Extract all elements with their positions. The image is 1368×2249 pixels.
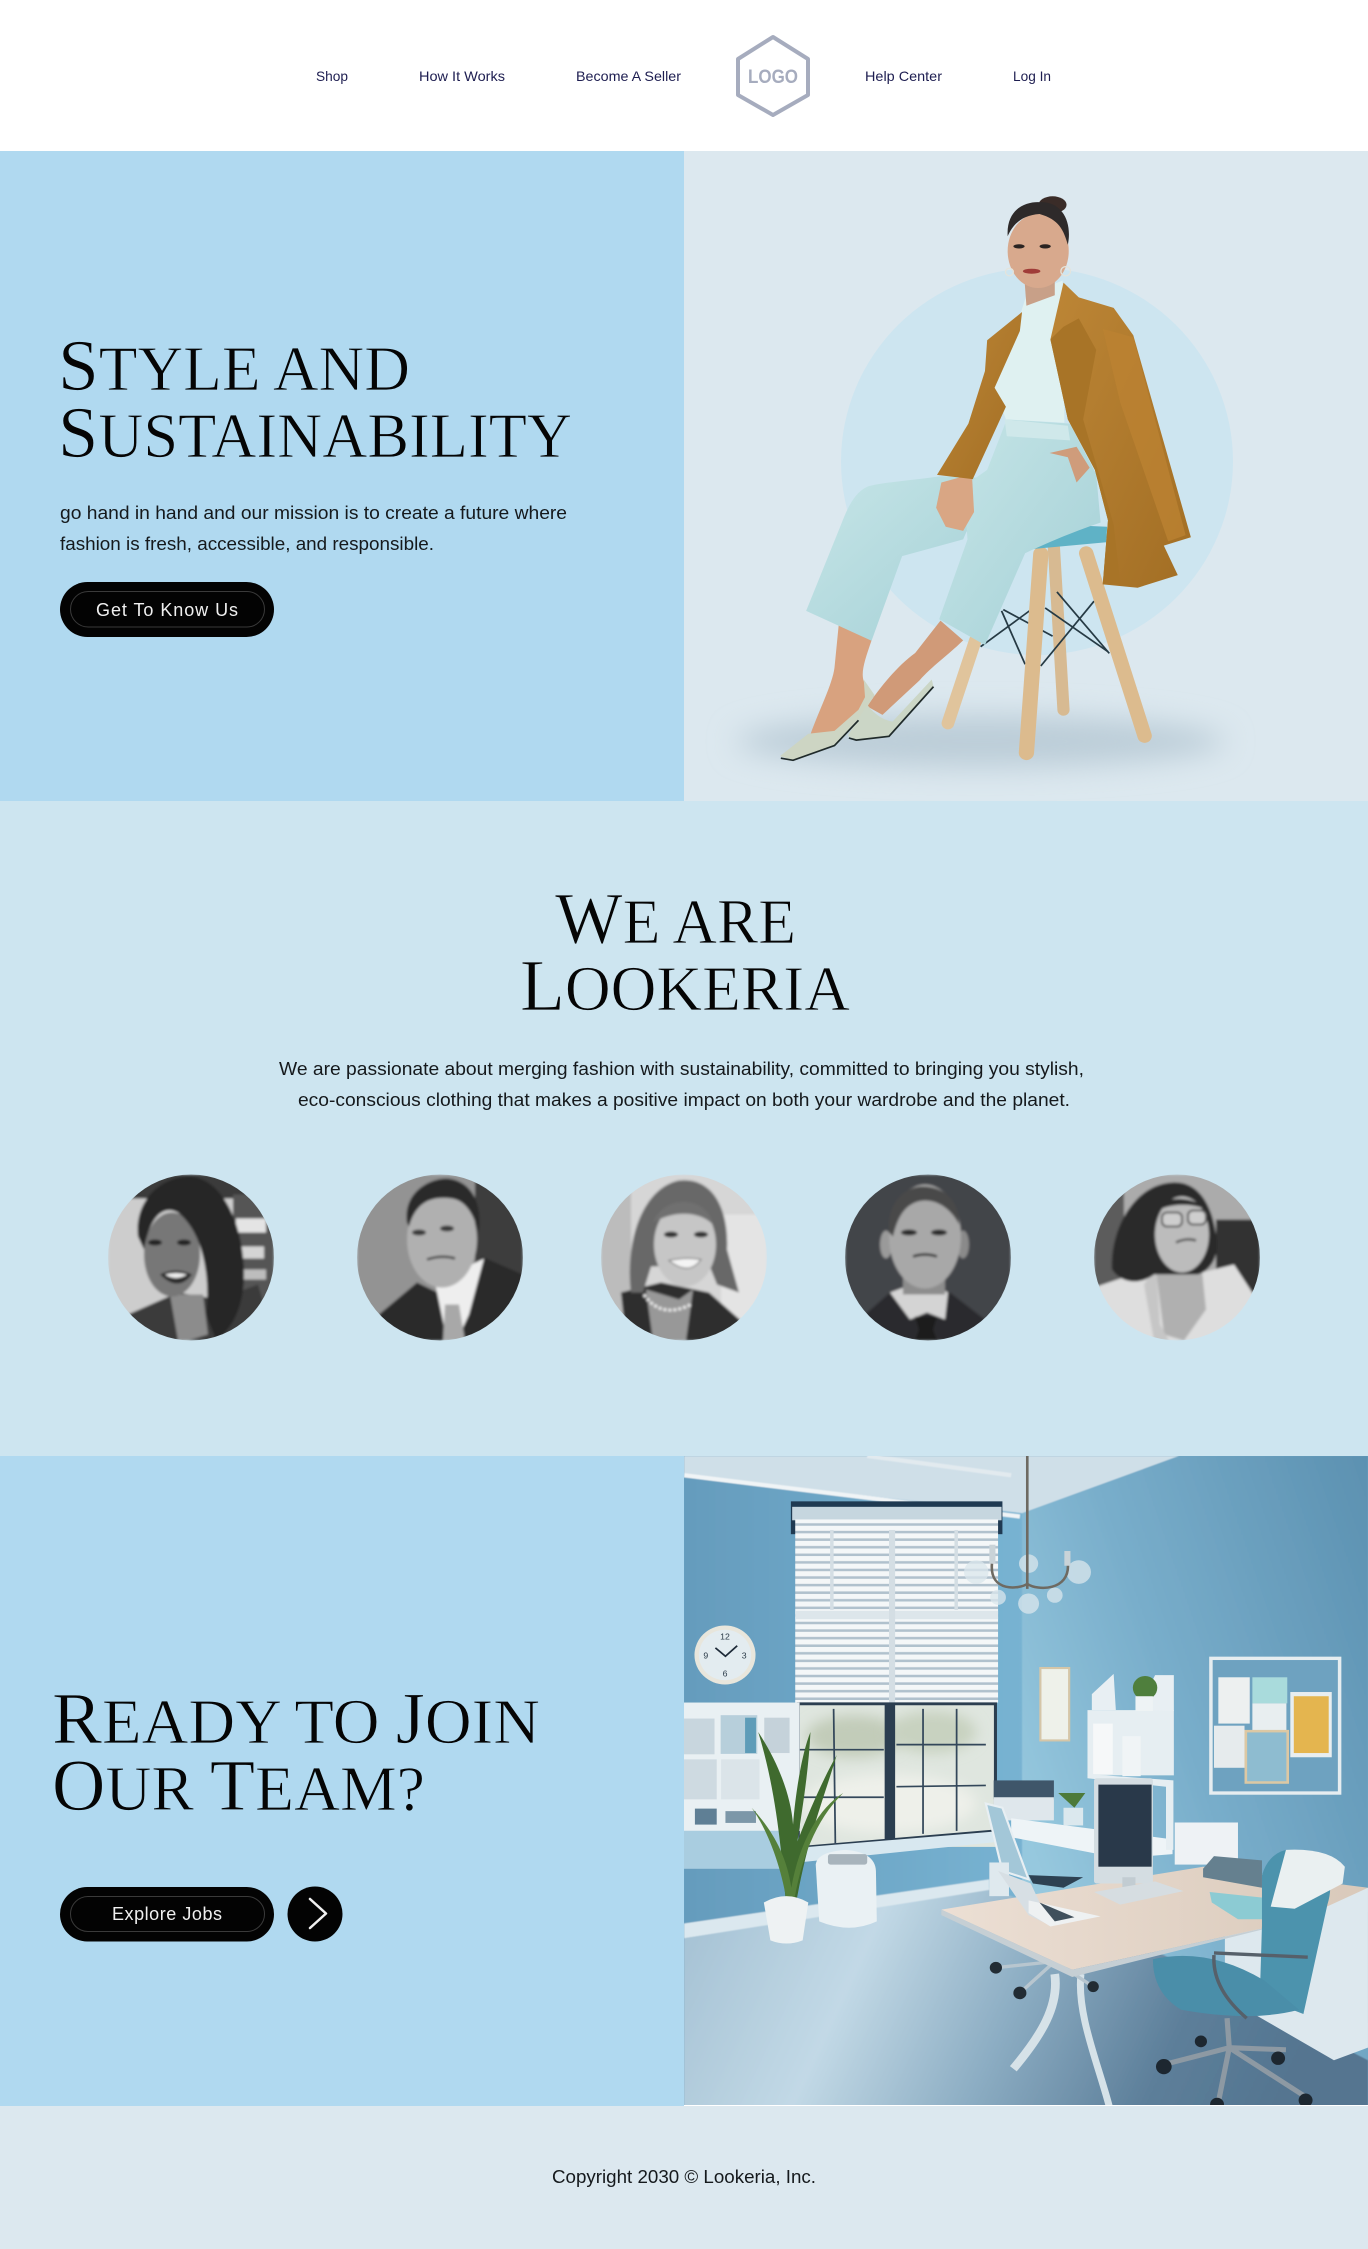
button: Get To Know Us: Get To Know Us (96, 600, 238, 620)
button: Explore Jobs: Explore Jobs (112, 1904, 222, 1924)
about heading: LOOKERIA (520, 945, 850, 1026)
hero paragraph: fashion is fresh, accessible, and responsible. (60, 533, 434, 554)
wall clock (694, 1626, 756, 1684)
portrait 4: man with dark background (845, 1174, 1011, 1340)
panel: hero illustration (684, 151, 1368, 801)
walls (684, 1456, 1368, 2107)
logo: LOGO (748, 67, 798, 88)
logo (738, 37, 808, 115)
neck (1024, 276, 1055, 306)
right cabinet (1225, 1888, 1368, 2060)
panel: join our team text (0, 1456, 684, 2107)
bookcase (1087, 1674, 1174, 1850)
hero paragraph (60, 502, 567, 554)
coat right side (1050, 283, 1191, 588)
hand in pocket (1050, 447, 1090, 483)
illustration: office interior (684, 1456, 1368, 2111)
join heading: READY TO JOIN (52, 1678, 540, 1759)
nav link: How It Works: How It Works (419, 68, 505, 84)
calves and feet (810, 624, 874, 734)
potted plant (752, 1732, 843, 1944)
main desk (941, 1867, 1368, 2107)
coat left side (937, 312, 1022, 479)
laptop (998, 1871, 1101, 1926)
illustration: seated woman on stool (736, 196, 1225, 767)
button: Get To Know Us (60, 582, 274, 637)
about heading (520, 878, 850, 1026)
nav link: Log In: Log In (1013, 68, 1051, 84)
notice board (1211, 1658, 1340, 1793)
drawer unit (1175, 1822, 1238, 1865)
chandelier (964, 1456, 1091, 1614)
stool (948, 520, 1145, 753)
wall clock: 3 (742, 1650, 747, 1660)
wall clock: 9 (703, 1650, 708, 1660)
floor shadow (736, 715, 1225, 767)
about paragraph (279, 1058, 1084, 1110)
portrait 2: man in suit (357, 1174, 523, 1340)
panel: about us (0, 801, 1368, 1456)
nav link: Shop: Shop (316, 68, 348, 84)
back office chair (986, 1804, 1083, 1896)
header (0, 0, 1368, 151)
accent circle (841, 268, 1233, 655)
side desk and printer (994, 1780, 1173, 1858)
hero heading (58, 325, 572, 473)
teal office chair (1153, 1850, 1345, 2111)
desk items (1203, 1856, 1262, 1920)
ceiling (684, 1456, 1179, 1513)
portrait 1: woman with long dark hair (108, 1174, 274, 1340)
nav link: Become A Seller: Become A Seller (576, 68, 681, 84)
floor (684, 1888, 1368, 2107)
about paragraph: eco-conscious clothing that makes a positive impact on both your wardrobe and the planet. (298, 1089, 1070, 1110)
button: Explore Jobs (60, 1887, 274, 1942)
hero paragraph: go hand in hand and our mission is to create a future where (60, 502, 567, 523)
portrait 5: woman with glasses (1094, 1174, 1260, 1340)
join heading: OUR TEAM? (52, 1745, 425, 1826)
hero heading: STYLE AND (58, 325, 410, 406)
join heading (52, 1678, 540, 1826)
nav link: Help Center: Help Center (865, 68, 942, 84)
footer (0, 2106, 1368, 2249)
panel: hero text (0, 151, 684, 801)
shoes (780, 679, 875, 760)
window (791, 1501, 1002, 1862)
wall clock: 12 (720, 1632, 730, 1641)
about heading: WE ARE (555, 878, 796, 959)
arrow button (288, 1886, 342, 1942)
shredder (816, 1850, 877, 1928)
hero heading: SUSTAINABILITY (58, 392, 572, 473)
desktop monitor (1094, 1778, 1183, 1905)
portrait 3: smiling woman with necklace (601, 1174, 767, 1340)
head (1005, 196, 1070, 288)
framed poster (1040, 1668, 1069, 1740)
wall clock: 6 (723, 1669, 728, 1678)
copyright: Copyright 2030 © Lookeria, Inc. (552, 2166, 816, 2187)
hand (936, 474, 974, 531)
left shelves (684, 1703, 800, 1869)
shirt (995, 280, 1064, 423)
trousers (806, 476, 989, 641)
about paragraph: We are passionate about merging fashion with sustainability, committed to bringing you stylish, (279, 1058, 1084, 1079)
